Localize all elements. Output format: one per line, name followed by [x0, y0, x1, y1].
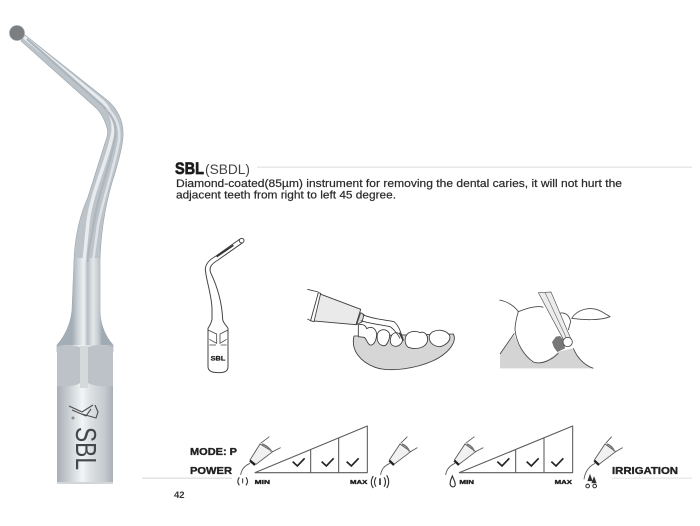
engraved logo — [69, 405, 98, 420]
check marks — [497, 458, 563, 466]
description text — [176, 178, 622, 202]
hexagonal flats — [57, 345, 80, 386]
gum shading — [500, 335, 593, 368]
label: irrigation: IRRIGATION — [612, 466, 678, 477]
label: power: POWER — [190, 466, 233, 477]
label: mode: MODE: P — [190, 447, 237, 458]
min label: MIN — [255, 480, 270, 486]
icon: handpiece max power — [371, 437, 417, 488]
footer rule left — [142, 478, 232, 479]
shaft highlights — [24, 37, 113, 262]
icon: handpiece min power — [238, 437, 281, 485]
illustration: instrument outline — [205, 238, 244, 373]
tooth outlines — [499, 300, 610, 368]
icon: handpiece min water — [446, 437, 483, 487]
instrument photo: SBL tip — [10, 26, 123, 484]
footer rule right — [612, 478, 692, 479]
gum — [353, 334, 454, 370]
irrigation triangle — [459, 426, 573, 473]
heading — [175, 160, 250, 178]
icon: handpiece max water — [584, 437, 623, 488]
shaft — [21, 35, 123, 352]
illustration: handpiece on lower teeth — [307, 289, 454, 370]
heading: (SBDL) — [205, 161, 250, 177]
power scale — [238, 426, 417, 488]
description text: adjacent teeth from right to left 45 degree. — [176, 190, 396, 202]
label SBL: SBL — [211, 356, 225, 363]
caries — [552, 336, 565, 352]
page number: 42 — [174, 490, 185, 501]
irrigation scale — [446, 426, 623, 488]
handpiece — [311, 293, 361, 325]
base edge — [57, 482, 113, 484]
diamond ball tip — [10, 26, 24, 40]
max label: MAX — [555, 480, 572, 486]
heading: SBL — [175, 160, 204, 178]
heading rule — [257, 166, 692, 168]
check marks — [293, 458, 359, 466]
min label: MIN — [459, 480, 474, 486]
power triangle — [255, 426, 367, 473]
instrument — [538, 292, 571, 339]
teeth — [358, 324, 450, 348]
engraved label SBL: SBL — [69, 427, 101, 470]
grip body — [57, 345, 113, 483]
description text: Diamond-coated(85µm) instrument for removing the dental caries, it will not hurt the — [176, 178, 622, 190]
lower shaft shading — [57, 258, 113, 352]
illustration: tooth cross-section — [499, 292, 610, 368]
tip — [361, 315, 403, 340]
max label: MAX — [350, 480, 368, 486]
